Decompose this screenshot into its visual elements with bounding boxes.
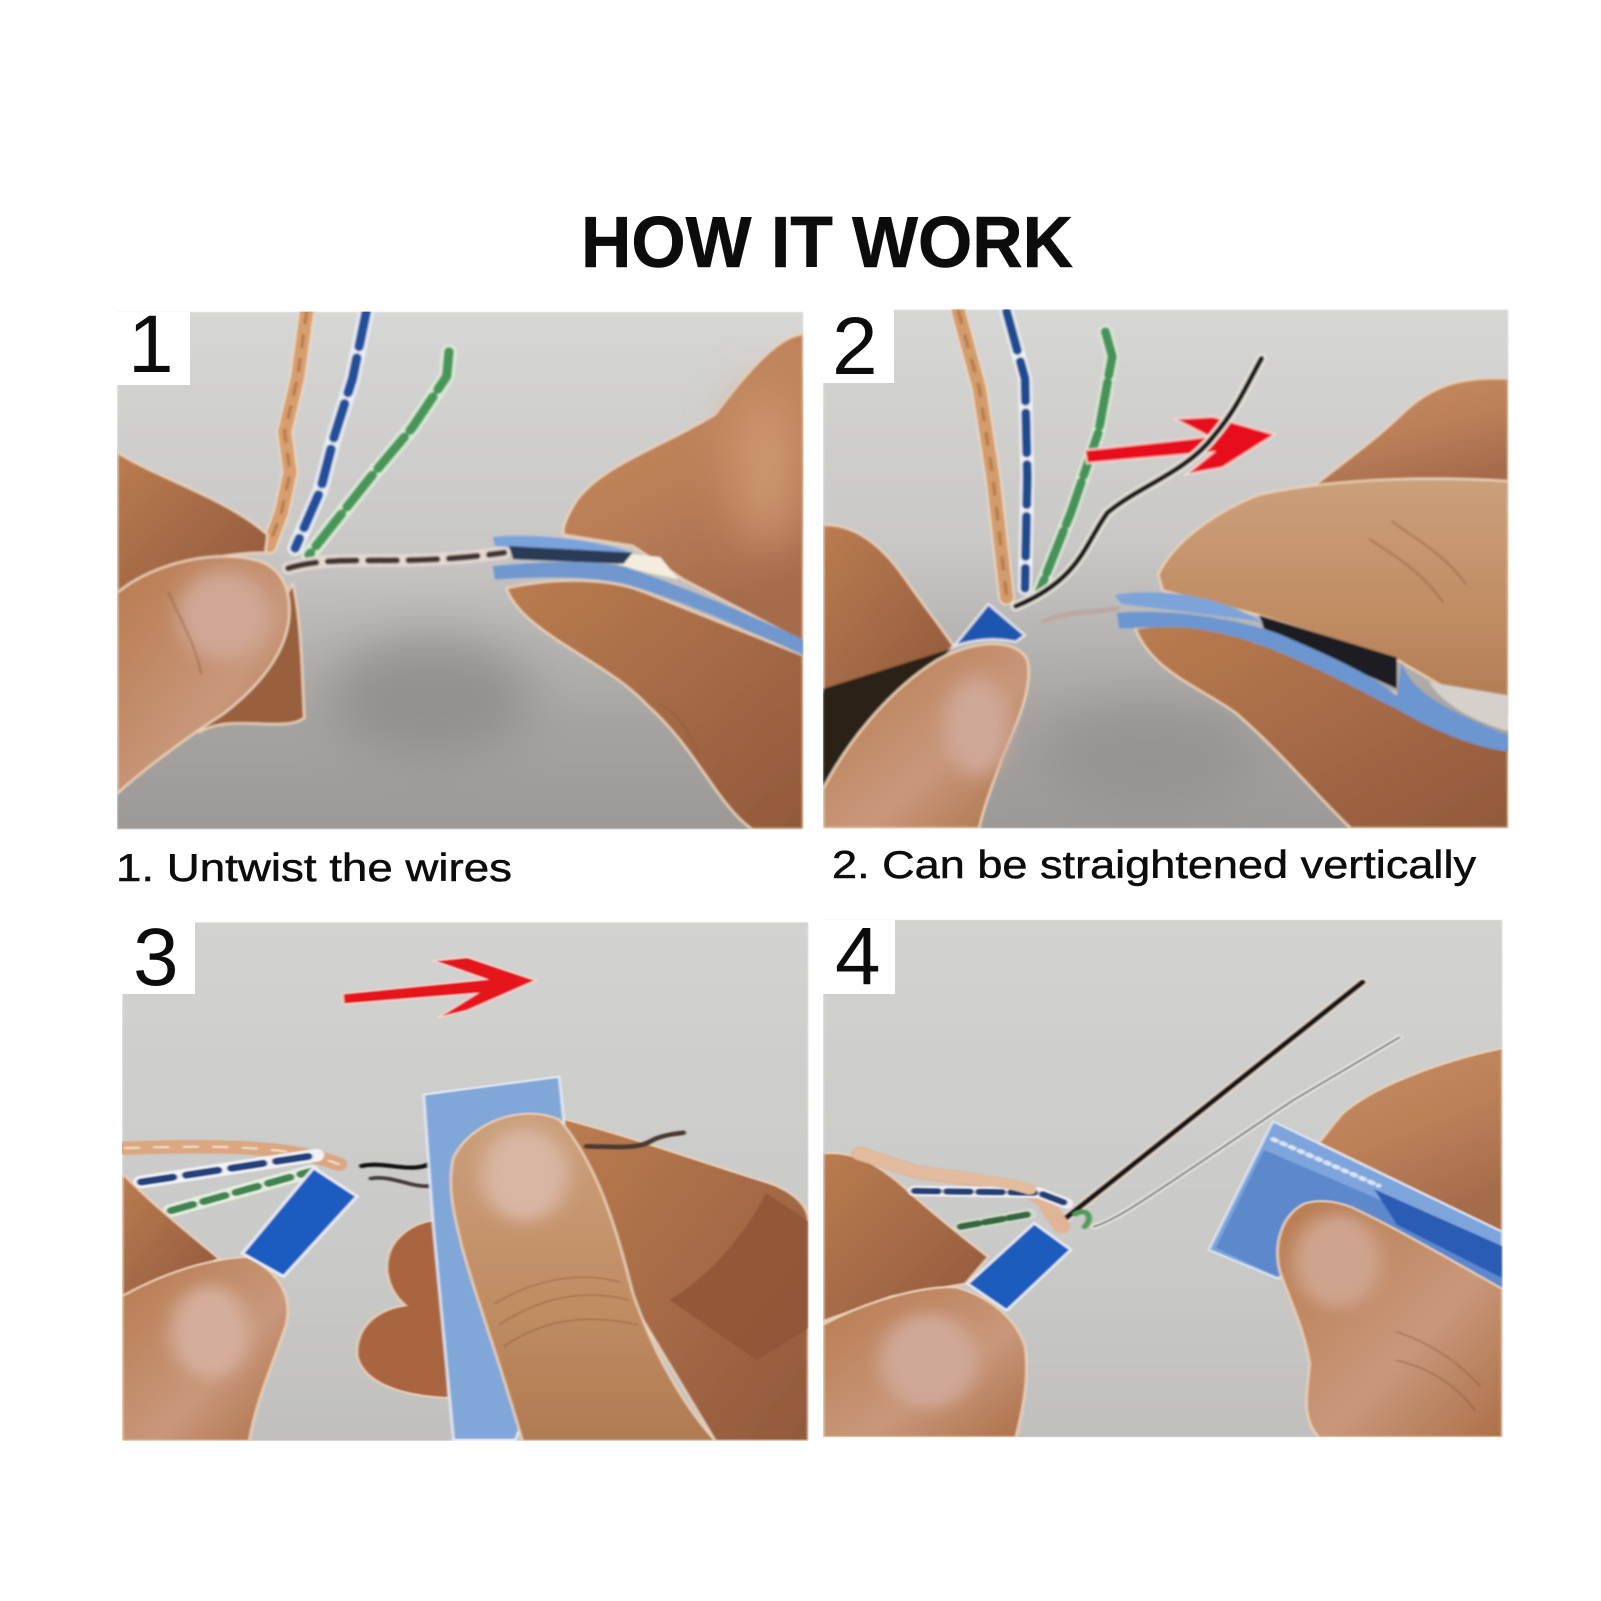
caption: step 1: 1. Untwist the wires bbox=[116, 847, 512, 890]
icon: blue tool bbox=[424, 1077, 582, 1440]
icon: right hand bbox=[1135, 479, 1509, 829]
panel: step 3 photo bbox=[122, 912, 809, 1441]
icon: right hand bbox=[506, 334, 803, 829]
number box 3: 3 bbox=[133, 912, 179, 1003]
icon: black wire bbox=[1016, 358, 1261, 606]
icon: left hand bbox=[122, 1173, 288, 1441]
icon: left hand back bbox=[823, 1153, 988, 1321]
icon: red arrow bbox=[342, 957, 536, 1018]
icon: left hand bbox=[117, 452, 304, 794]
number box 2 bbox=[823, 301, 894, 392]
number box 4 bbox=[823, 911, 895, 1002]
panel: step 1 photo bbox=[117, 299, 803, 829]
caption: step 2: 2. Can be straightened vertically bbox=[832, 844, 1477, 887]
number box 1: 1 bbox=[128, 299, 174, 390]
icon: twisted orange wire bbox=[958, 312, 1007, 597]
icon: red arrow bbox=[1085, 417, 1275, 475]
icon: right hand back finger bbox=[1314, 378, 1509, 495]
number box 2: 2 bbox=[832, 301, 878, 392]
icon: blue tool bbox=[1209, 1121, 1503, 1289]
icon: blue cable bbox=[242, 1168, 357, 1277]
icon: thumb bbox=[451, 1114, 715, 1441]
icon: twisted blue wire bbox=[295, 312, 366, 548]
icon: left hand bbox=[823, 525, 1029, 829]
panel: step 2 photo bbox=[823, 301, 1509, 829]
number box 1 bbox=[117, 299, 190, 390]
icon: twisted green wire bbox=[309, 352, 449, 555]
icon: brown wire tip bbox=[587, 1133, 683, 1147]
icon: blue cable bbox=[968, 1223, 1071, 1311]
icon: right hand fingers behind tool bbox=[357, 1118, 809, 1441]
icon: right hand back bbox=[1319, 1048, 1503, 1232]
icon: twisted orange wire bbox=[269, 312, 307, 546]
icon: black wires bbox=[362, 1162, 433, 1186]
icon: black and white pair bbox=[288, 553, 504, 568]
icon: blue cable bbox=[954, 604, 1025, 646]
number box 3 bbox=[122, 912, 195, 1003]
icon: silver wire bbox=[1094, 1037, 1399, 1227]
icon: twisted blue wire bbox=[1007, 312, 1027, 588]
icon: twisted green wire bbox=[1039, 332, 1112, 593]
icon: right thumb bbox=[1278, 1201, 1503, 1437]
panel: step 4 photo bbox=[823, 911, 1503, 1437]
title: HOW IT WORK bbox=[581, 203, 1073, 283]
icon: blue wire stripper bbox=[1115, 592, 1509, 751]
icon: twisted wires bbox=[860, 1153, 1089, 1227]
number box 4: 4 bbox=[835, 911, 881, 1002]
icon: twisted wires bbox=[125, 1147, 339, 1211]
icon: blue wire stripper bbox=[493, 536, 803, 655]
icon: left thumb bbox=[823, 1287, 1026, 1437]
icon: silver wire bbox=[1043, 608, 1117, 622]
icon: black wire bbox=[1062, 982, 1363, 1221]
